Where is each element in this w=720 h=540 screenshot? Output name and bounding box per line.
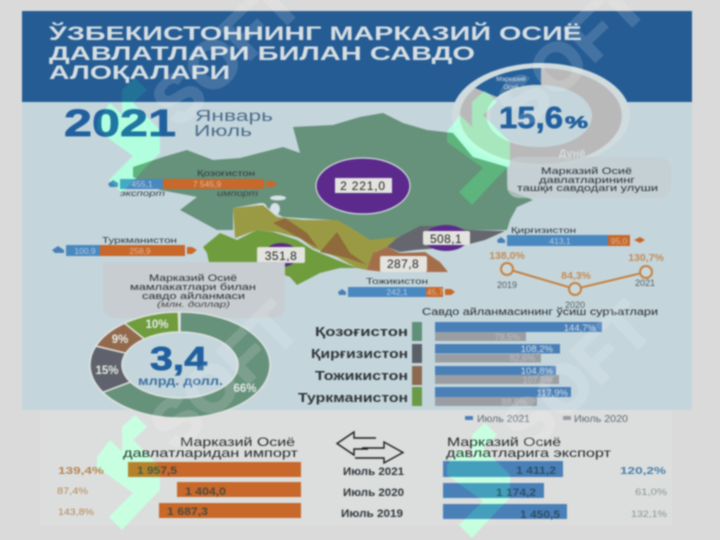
value: 351,8: [265, 249, 297, 263]
share caption: давлатларининг: [539, 175, 636, 186]
share caption box: [507, 157, 671, 198]
title: ЎЗБЕКИСТОННИНГ МАРКАЗИЙ ОСИЁ: [47, 23, 582, 45]
header band: [22, 11, 692, 102]
watermark: logo marks: [97, 78, 510, 538]
year labels: Июль 2019: [341, 508, 403, 520]
donut outer glow: [452, 63, 630, 167]
export bar: [120, 179, 163, 189]
2021 bars: [435, 322, 602, 397]
captions: импорт: [217, 189, 258, 198]
value box: [423, 231, 470, 245]
export percents: 61,0%: [635, 487, 667, 497]
heading: exports: давлатларига экспорт: [446, 446, 612, 460]
donut percent labels: 66%: [233, 383, 257, 395]
value box: [380, 256, 427, 272]
year labels: [497, 278, 655, 310]
donut percent labels: 15%: [95, 365, 119, 377]
donut total: [138, 340, 223, 388]
donut total: 3,4: [150, 340, 208, 377]
purple oval: [316, 158, 410, 214]
segment label: [496, 75, 526, 91]
watermark: SOFT text: SOFT: [488, 288, 666, 463]
value: 2 221,0: [340, 179, 386, 193]
import arrow: [634, 237, 645, 243]
turnover caption: Марказий Осиё: [149, 273, 237, 283]
bar 2019: [159, 503, 301, 518]
import percents: 143,8%: [58, 507, 94, 517]
Kyrgyzstan export-import bar: [497, 225, 645, 246]
import bar: [608, 235, 630, 246]
map: Uzbekistan: [233, 205, 400, 270]
values: [549, 236, 628, 246]
watermark: SOFT text: [135, 0, 666, 463]
Turkmenistan export-import bar: [52, 235, 197, 256]
country labels: Туркманистон: [298, 390, 408, 405]
heading: exports: [446, 435, 612, 460]
export bar: [348, 287, 426, 297]
heading: imports: Марказий Осиё: [180, 435, 295, 449]
export arrow: [52, 246, 64, 253]
title: ДАВЛАТЛАРИ БИЛАН САВДО: [49, 44, 475, 65]
Tajikistan export-import bar: [338, 276, 455, 297]
map: Kazakhstan: [133, 113, 533, 240]
2020 values: 107,5%: [522, 375, 553, 385]
values: 100,9: [74, 246, 96, 256]
year labels: [341, 466, 404, 520]
export values: 1 174,2: [496, 487, 536, 499]
donut percent labels: 9%: [112, 334, 128, 346]
bar 2020: [177, 482, 301, 497]
segment: Kazakhstan 66%: [103, 312, 270, 418]
bar 2020: [443, 483, 544, 498]
year 2021: 2021: [64, 103, 176, 145]
Kyrgyzstan trade value: [423, 225, 470, 251]
heading: imports: давлатларидан импорт: [123, 446, 299, 460]
lower panel background: [40, 410, 672, 525]
heading: imports: [123, 435, 299, 460]
2021 values: 108,2%: [521, 344, 554, 355]
import arrow: [187, 247, 197, 254]
values: [386, 287, 444, 297]
import arrow: [445, 289, 455, 295]
heading: exports: Марказий Осиё: [447, 435, 561, 449]
label: Қирғизистон: [511, 225, 576, 235]
line: [507, 269, 646, 289]
import bar: [163, 179, 264, 189]
export percents: 120,2%: [620, 465, 667, 477]
export bars: [443, 461, 667, 521]
percent labels: 84,3%: [561, 270, 592, 282]
percent labels: 138,0%: [489, 250, 525, 262]
segment label: Осиё: [503, 84, 519, 91]
value box: [335, 178, 392, 193]
share caption: Марказий Осиё: [541, 166, 632, 177]
donut total: млрд. долл.: [138, 374, 223, 388]
turnover caption: савдо айланмаси: [142, 291, 245, 301]
label: Тожикистон: [366, 276, 428, 286]
import bar: [100, 245, 185, 256]
share caption: ташқи савдодаги улуши: [517, 183, 658, 194]
segment: Tajikistan 9%: [96, 323, 144, 353]
segment: Turkmenistan 10%: [125, 312, 179, 339]
period January-July: Июль: [194, 123, 252, 140]
import bar: [426, 287, 443, 297]
2021 values: [521, 323, 597, 399]
period January-July: Январь: [195, 108, 273, 125]
year labels: Июль 2021: [343, 466, 404, 478]
share caption: [517, 166, 658, 194]
import values: 1 687,3: [167, 506, 208, 518]
share value: [499, 100, 588, 135]
turnover donut chart: [90, 312, 270, 418]
donut percent labels: [95, 319, 257, 395]
segment: Kyrgyzstan 15%: [90, 346, 130, 392]
country labels: [298, 324, 408, 405]
values: [131, 179, 221, 189]
label: Қозоғистон: [197, 168, 255, 178]
turnover caption: (млн. доллар): [157, 300, 230, 309]
map panel background: [22, 102, 692, 410]
export percents: [620, 465, 667, 519]
export arrow: [338, 289, 346, 295]
donut centre: [490, 85, 592, 147]
values: 95,0: [611, 236, 628, 246]
title: АЛОҚАЛАРИ: [49, 63, 230, 84]
Tajikistan trade value: [380, 256, 427, 272]
2020 values: [494, 332, 553, 407]
turnover caption box: [103, 262, 285, 318]
export values: [496, 465, 560, 521]
export values: 1 450,5: [520, 509, 560, 521]
Kazakhstan trade value: [316, 158, 410, 214]
year labels: 2021: [635, 278, 655, 288]
icon: exchange arrows: [337, 432, 403, 463]
2021 values: 117,9%: [536, 388, 569, 399]
map of Central Asia: [133, 113, 533, 285]
2021 values: 104,8%: [521, 366, 554, 377]
legend: July 2021: Июль 2021: [477, 414, 530, 425]
turnover caption: [130, 273, 256, 309]
arrow left: [337, 432, 376, 455]
year labels: Июль 2020: [343, 487, 404, 499]
captions: экспорт: [120, 189, 165, 198]
purple oval: [424, 225, 468, 251]
export arrow: [497, 237, 505, 243]
bar 2019: [443, 504, 567, 519]
turnover caption: мамлакатлари билан: [130, 282, 256, 292]
export bar: [66, 245, 100, 256]
value: 508,1: [430, 232, 462, 246]
import values: 1 404,0: [185, 486, 226, 498]
values: 258,9: [129, 246, 151, 256]
chart legend: [465, 414, 628, 425]
values: 7 545,9: [193, 179, 221, 189]
bar 2021: [443, 461, 563, 477]
segment label: Марказий: [496, 75, 526, 83]
import percents: 87,4%: [57, 486, 88, 496]
values: 242,1: [386, 287, 408, 297]
import percents: [57, 465, 105, 517]
donut: world segment: [460, 68, 622, 164]
values: [74, 246, 151, 256]
country labels: Тожикистон: [315, 368, 408, 383]
export percents: 132,1%: [631, 509, 667, 519]
year labels: 2020: [565, 300, 585, 310]
country colour swatches: [412, 322, 422, 406]
bar chart: growth rates by country: [298, 322, 602, 407]
import values: 1 957,5: [137, 465, 177, 477]
2020 values: 79,5%: [494, 332, 520, 342]
share value: %: [565, 113, 588, 132]
percent labels: [489, 250, 664, 282]
Kazakhstan export-import bar: [108, 168, 277, 198]
Turkmenistan trade value: [257, 243, 305, 267]
2020 values: 92,6%: [509, 353, 535, 363]
map: Turkmenistan: [203, 230, 357, 285]
export values: 1 411,2: [516, 465, 556, 477]
legend: July 2020: Июль 2020: [574, 414, 628, 425]
values: 455,1: [131, 179, 153, 189]
value box: [257, 247, 305, 263]
value: 287,8: [387, 257, 419, 271]
export arrow: [108, 180, 118, 187]
import arrow: [266, 181, 277, 187]
heading: growth rates: Савдо айланмасининг ўсиш суръатлари: [422, 306, 658, 318]
country labels: Қирғизистон: [311, 346, 408, 361]
2020 values: 88,5%: [501, 397, 527, 407]
map: Tajikistan: [367, 247, 448, 272]
year labels: 2019: [497, 280, 517, 290]
donut: Central Asia segment: [475, 68, 541, 97]
line chart: growth by year: [489, 250, 664, 310]
import values: [137, 465, 226, 518]
points: [501, 263, 652, 295]
export bar: [507, 235, 608, 246]
2020 bars: [435, 332, 559, 406]
arrow right: [355, 442, 403, 463]
values: 413,1: [549, 236, 571, 246]
world label: Дунё: [559, 148, 585, 160]
bar 2021: [128, 462, 301, 477]
label: Туркманистон: [102, 235, 177, 245]
map: Aral sea: [257, 196, 286, 215]
watermark: SOFT text: SOFT: [135, 288, 313, 463]
title: [47, 23, 582, 84]
map: Uzbekistan desert dots: [273, 218, 367, 265]
import bars: [57, 462, 301, 518]
percent labels: 130,7%: [628, 252, 664, 264]
values: 45,7: [427, 287, 444, 297]
donut percent labels: 10%: [145, 319, 169, 331]
2021 values: 144,7%: [564, 323, 597, 334]
import percents: 139,4%: [58, 465, 105, 477]
map: Kyrgyzstan: [387, 226, 505, 252]
share value: 15,6: [499, 100, 563, 135]
purple oval: [264, 243, 298, 267]
top share donut chart: [452, 63, 630, 167]
captions: [120, 189, 258, 198]
country labels: Қозоғистон: [315, 324, 408, 339]
period January-July: [194, 108, 273, 140]
